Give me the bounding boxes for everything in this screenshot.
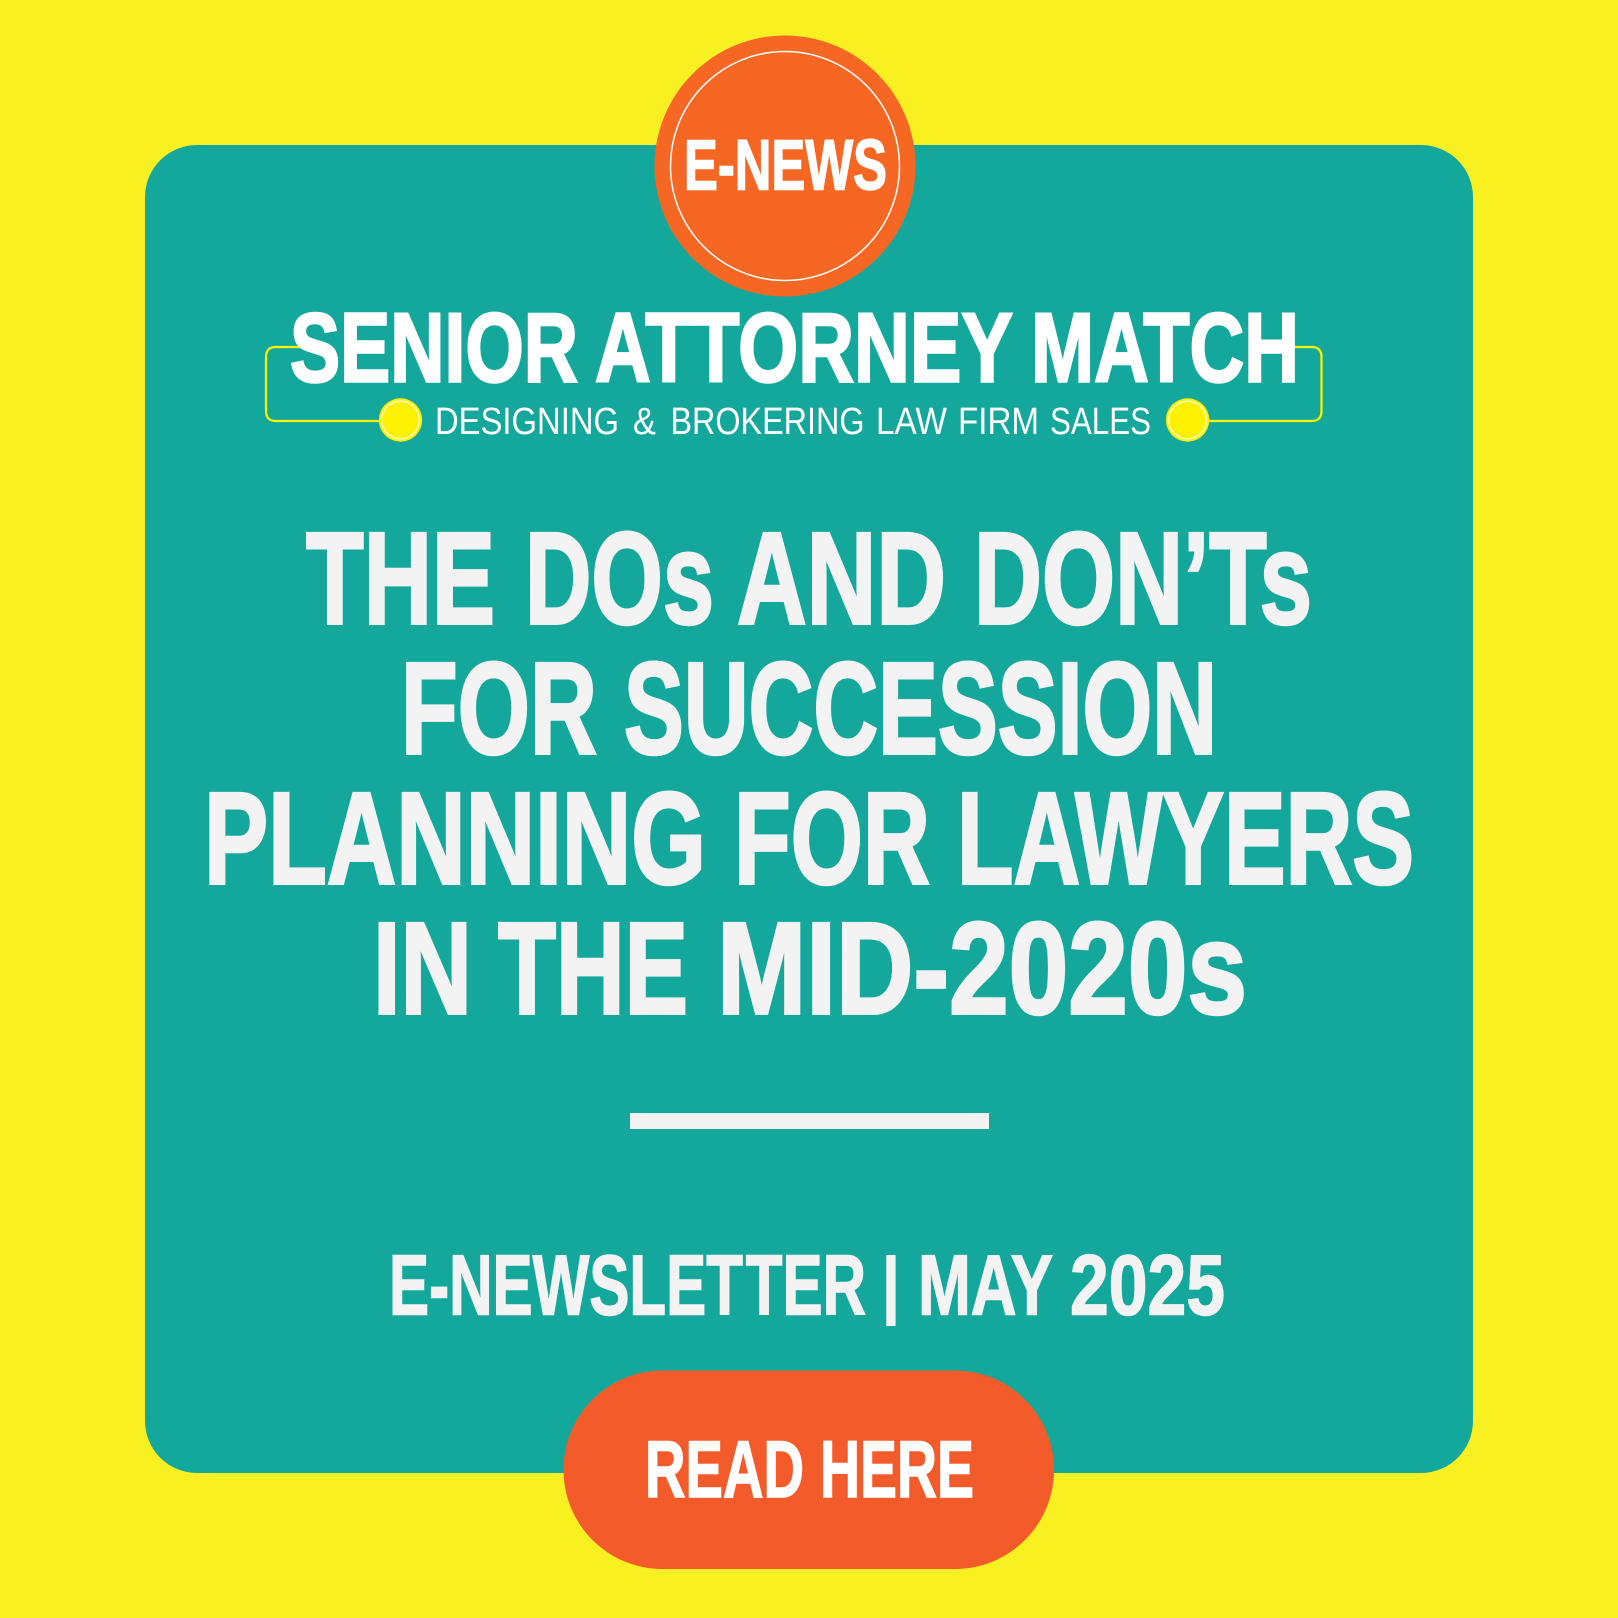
headline line 3: LAWYERS	[957, 764, 1414, 912]
headline line 1: DOs	[525, 504, 714, 652]
logo wordmark: SENIOR	[290, 293, 578, 403]
headline line 1: AND	[737, 504, 946, 652]
button label: READ	[645, 1425, 804, 1515]
edition line: MAY	[918, 1238, 1053, 1334]
headline line 2: FOR	[401, 634, 597, 782]
headline line 1: THE	[306, 504, 495, 652]
button: READ HERE	[564, 1370, 1054, 1569]
headline line 3: PLANNING	[204, 764, 706, 912]
button label: HERE	[820, 1425, 974, 1515]
headline line 2	[401, 634, 1217, 782]
headline line 4: THE	[498, 894, 688, 1042]
headline line 4: IN	[373, 894, 472, 1042]
logo wordmark	[290, 293, 1299, 403]
logo wordmark: MATCH	[1031, 293, 1299, 403]
badge: E-NEWS	[654, 36, 916, 296]
edition line: E-NEWSLETTER	[389, 1238, 866, 1334]
badge disc	[654, 36, 916, 296]
headline line 3: FOR	[734, 764, 930, 912]
left connector line	[266, 347, 380, 421]
logo tagline: BROKERING	[670, 401, 864, 443]
logo wordmark: ATTORNEY	[595, 293, 1013, 403]
main headline	[204, 504, 1414, 1042]
button pill	[564, 1370, 1054, 1569]
logo tagline: FIRM	[958, 401, 1039, 443]
badge inner ring	[670, 52, 900, 280]
right connector line	[1207, 347, 1322, 421]
logo tagline: LAW	[876, 401, 947, 443]
divider rule	[630, 1113, 989, 1129]
panel: teal card	[145, 145, 1473, 1473]
badge label: E-NEWS	[684, 126, 887, 206]
headline line 1	[306, 504, 1312, 652]
edition line: 2025	[1070, 1238, 1225, 1334]
button label	[645, 1425, 974, 1515]
edition line	[389, 1238, 1225, 1334]
headline line 3	[204, 764, 1414, 912]
logo tagline: DESIGNING	[435, 401, 619, 443]
headline line 2: SUCCESSION	[624, 634, 1217, 782]
right yellow dot	[1166, 398, 1209, 442]
headline line 4: MID-2020s	[717, 894, 1247, 1042]
logo: Senior Attorney Match	[266, 293, 1322, 443]
logo tagline: &	[633, 401, 656, 443]
logo tagline: SALES	[1050, 401, 1151, 443]
logo tagline	[435, 401, 1151, 443]
left yellow dot	[379, 398, 422, 442]
headline line 1: DON’Ts	[974, 504, 1312, 652]
headline line 4	[373, 894, 1247, 1042]
